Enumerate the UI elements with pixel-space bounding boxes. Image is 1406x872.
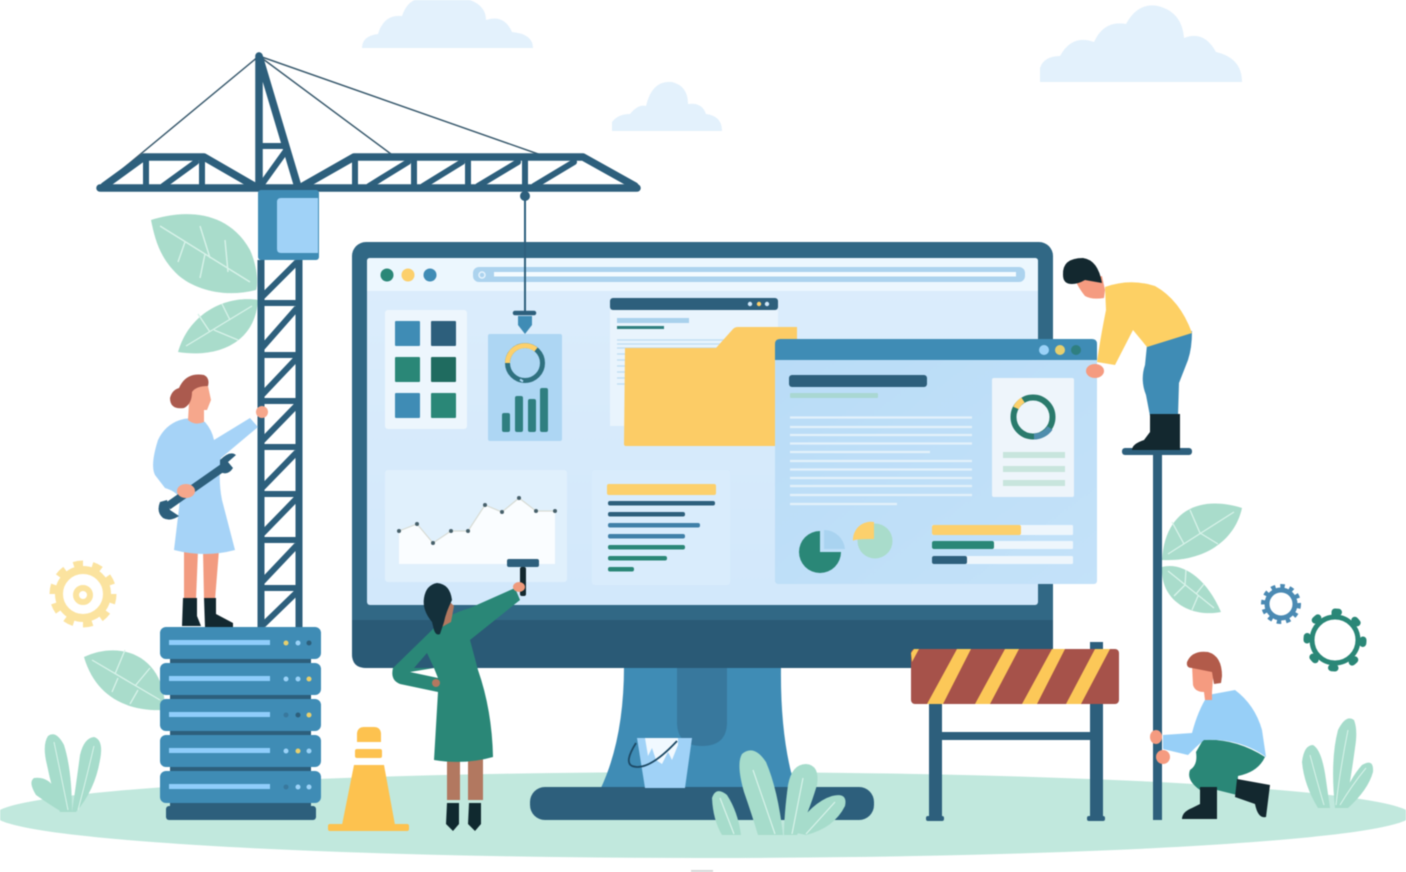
screen (367, 258, 1038, 605)
barrier board (911, 649, 1119, 704)
man boots (1132, 414, 1180, 450)
crouching man boots (1182, 779, 1270, 819)
tall pole (1122, 448, 1192, 820)
barrier legs (926, 642, 1105, 821)
painter legs (447, 758, 483, 800)
crouching man trousers (1189, 740, 1265, 795)
hanging chart card (488, 334, 562, 441)
crane cables (102, 56, 541, 186)
bar list panel (592, 470, 730, 585)
woman painting (392, 559, 539, 831)
bottom edge mark (691, 870, 713, 872)
painter head (424, 583, 454, 634)
monitor (352, 242, 1053, 820)
server light bars (169, 640, 270, 789)
traffic cone (328, 727, 409, 831)
progress bars (932, 525, 1073, 564)
barrier (911, 642, 1119, 821)
bucket (629, 738, 692, 788)
leaf: right lower (1162, 566, 1221, 613)
window body (775, 345, 1097, 584)
window title bar (775, 339, 1097, 360)
woman near hand (177, 484, 195, 498)
left plant (31, 734, 101, 812)
woman dress (153, 418, 258, 554)
barrier stripes (911, 649, 1110, 704)
crane hook (515, 191, 534, 334)
gear: large green (1307, 612, 1363, 668)
crane lower mast (261, 260, 299, 627)
cloud: top centre (362, 0, 533, 48)
paint roller (507, 559, 539, 596)
leaf: lower (178, 299, 258, 353)
man sweater (1097, 282, 1192, 365)
crane (100, 56, 637, 627)
server stack (160, 627, 321, 820)
pie charts (799, 522, 892, 573)
painter boots (446, 803, 481, 831)
man on pole (1063, 258, 1192, 450)
painter hand at hip (432, 679, 440, 687)
man hand (1086, 364, 1104, 378)
crane top mast (259, 56, 298, 188)
document window behind folder (610, 298, 778, 426)
line chart panel (385, 470, 567, 582)
cloud: small middle (612, 82, 722, 131)
text block (789, 375, 972, 504)
woman boots (182, 598, 233, 627)
server indicator dots (284, 640, 312, 790)
donut card (992, 378, 1074, 497)
gear: yellow left (53, 564, 113, 624)
crouching man hands (1150, 730, 1170, 764)
woman head (170, 375, 211, 424)
man trousers (1143, 331, 1192, 416)
ground (0, 772, 1406, 858)
cloud: top right (1040, 5, 1242, 82)
gear: small blue (1263, 586, 1299, 622)
server base (166, 655, 316, 820)
leaves behind crane (84, 214, 1242, 710)
gap between arm and torso (410, 653, 438, 678)
front browser window (775, 339, 1097, 584)
central plant (712, 750, 845, 835)
woman hand on crane (256, 406, 268, 418)
crane jib (100, 157, 637, 188)
leaf: large upper (151, 214, 257, 293)
woman legs (184, 550, 219, 600)
crouching man (1150, 652, 1270, 819)
man head (1063, 258, 1105, 299)
leaf: right upper (1162, 504, 1242, 560)
crane cab (258, 190, 319, 260)
painter dress (392, 588, 520, 762)
monitor frame (352, 242, 1053, 668)
monitor base (530, 787, 874, 820)
leaf: behind servers (84, 650, 165, 710)
tile grid panel (385, 310, 467, 429)
crouching man head (1187, 652, 1222, 700)
browser header (367, 258, 1038, 291)
monitor stand (600, 666, 796, 790)
crouching man sweater (1163, 690, 1266, 757)
wrench (159, 453, 236, 520)
woman with wrench (153, 375, 268, 627)
server units (160, 627, 321, 803)
folder (624, 327, 797, 446)
right plant (1302, 718, 1373, 808)
clouds (362, 0, 1242, 131)
